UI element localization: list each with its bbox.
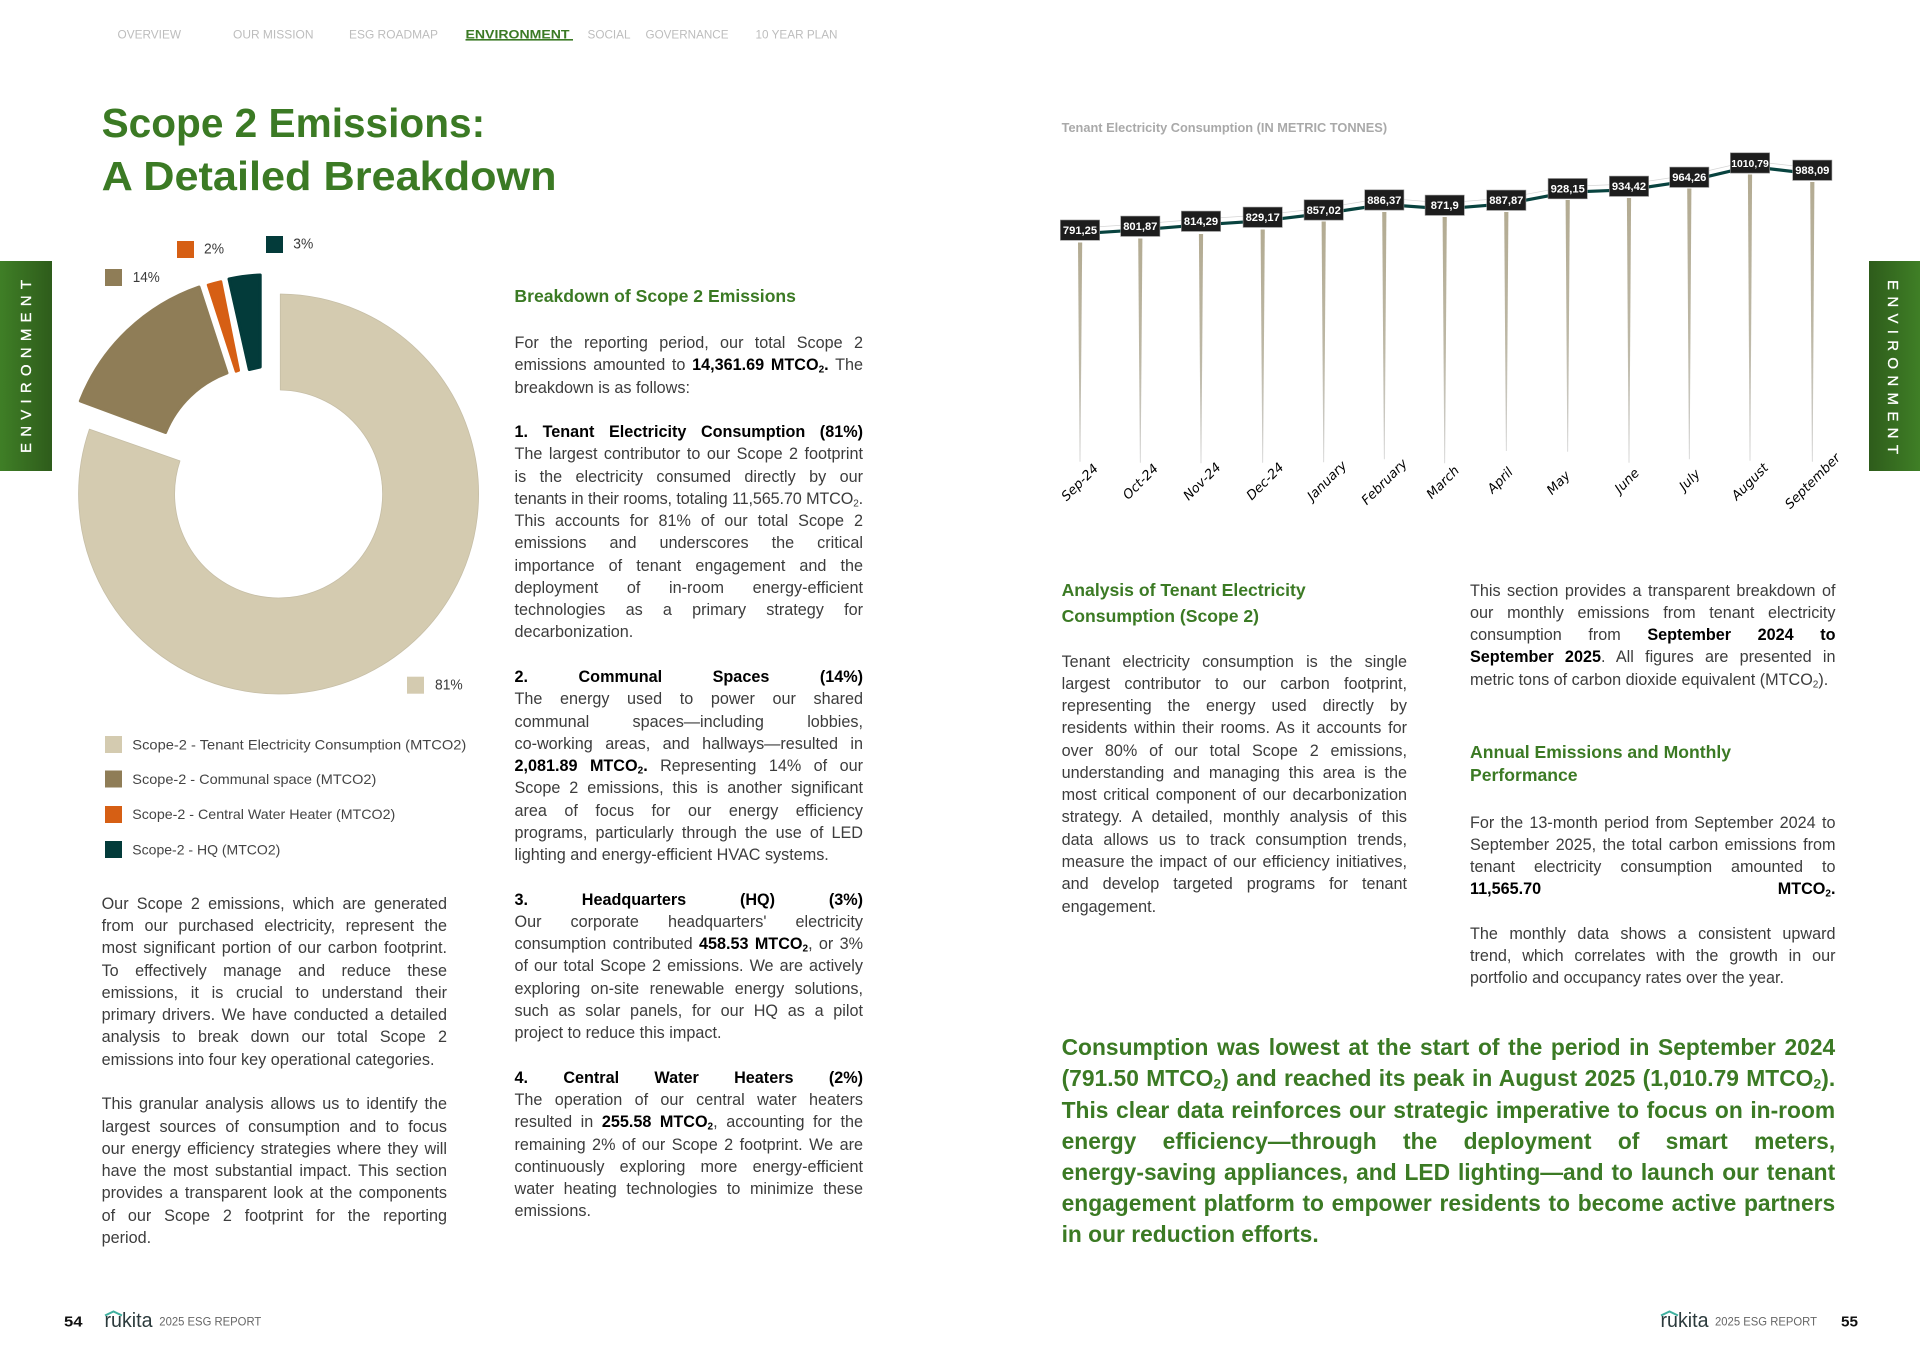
text block: transparency: metric tons of carbon dioxide equivalent (MTCO2). bbox=[1470, 671, 1828, 690]
text block: breakdown: 3. Headquarters (HQ) (3%) bbox=[514, 891, 863, 909]
text block: annual emissions: 11,565.70 MTCO2. bbox=[1470, 880, 1836, 900]
text block: scope 2 intro: primary drivers. We have conducted a detailed bbox=[102, 1006, 447, 1024]
x-axis labels: March bbox=[1424, 464, 1463, 502]
donut legend: Scope-2 - Tenant Electricity Consumption (MTCO2) bbox=[132, 736, 466, 752]
line chart: tenant electricity consumption: 1010,79 bbox=[1731, 159, 1769, 170]
line chart: tenant electricity consumption: 857,02 bbox=[1307, 205, 1341, 217]
text block: analysis: engagement. bbox=[1062, 898, 1156, 916]
heading: annual emissions: Performance bbox=[1470, 765, 1578, 785]
text block: breakdown: tenants in their rooms, totaling 11,565.70 MTCO2. bbox=[514, 490, 863, 509]
text block: breakdown: technologies as a primary strategy for bbox=[514, 601, 863, 619]
donut legend: Scope-2 - Communal space (MTCO2) bbox=[132, 771, 376, 787]
line chart: tenant electricity consumption: 814,29 bbox=[1184, 216, 1218, 228]
label: 3% bbox=[266, 236, 313, 253]
text block: breakdown: 4. Central Water Heaters (2%) bbox=[514, 1069, 863, 1087]
text block: transparency bbox=[1470, 582, 1836, 690]
text block: breakdown: 1. Tenant Electricity Consumption (81%) bbox=[514, 423, 863, 441]
text block: scope 2 intro: from our purchased electricity, represent the bbox=[102, 917, 447, 935]
text block: scope 2 intro: period. bbox=[102, 1229, 151, 1247]
text block: analysis: measure the impact of our efficiency initiatives, bbox=[1062, 853, 1407, 871]
text block: breakdown: project to reduce this impact. bbox=[514, 1024, 721, 1042]
line chart: tenant electricity consumption: 886,37 bbox=[1367, 195, 1401, 207]
x-axis labels: April bbox=[1484, 465, 1517, 498]
text block: breakdown: of our total Scope 2 emissions. We are actively bbox=[514, 957, 863, 975]
text block: analysis: data allows us to track consumption trends, bbox=[1062, 831, 1407, 849]
text block: breakdown: emissions amounted to 14,361.69 MTCO2. The bbox=[514, 356, 863, 376]
side tab: right bbox=[1869, 261, 1920, 471]
line chart: tenant electricity consumption: 887,87 bbox=[1489, 195, 1523, 207]
donut legend bbox=[105, 736, 466, 858]
line chart: tenant electricity consumption: 829,17 bbox=[1246, 212, 1280, 224]
page number: 55 bbox=[1841, 1313, 1858, 1330]
line chart: tenant electricity consumption: 964,26 bbox=[1672, 172, 1706, 184]
text block: scope 2 intro: largest sources of consumption and to focus bbox=[102, 1118, 447, 1136]
callout: energy-saving appliances, and LED lighting—and to launch our tenant bbox=[1062, 1159, 1835, 1185]
segment: HQ 3% bbox=[229, 275, 260, 370]
text block: breakdown: importance of tenant engagement and the bbox=[514, 557, 863, 575]
page number: 54 bbox=[64, 1313, 83, 1330]
footer: right page bbox=[1660, 1310, 1858, 1332]
text block: analysis: representing the energy used directly by bbox=[1062, 697, 1407, 715]
x-axis labels: Nov-24 bbox=[1181, 460, 1224, 504]
text block: annual emissions: portfolio and occupancy rates over the year. bbox=[1470, 969, 1784, 987]
text block: breakdown: water heating technologies to minimize these bbox=[514, 1180, 863, 1198]
line chart: tenant electricity consumption: 988,09 bbox=[1795, 165, 1829, 177]
text block: transparency: September 2025. All figures are presented in bbox=[1470, 648, 1835, 666]
heading: annual emissions: Annual Emissions and Monthly bbox=[1470, 742, 1731, 762]
side tab: right: ENVIRONMENT bbox=[1884, 280, 1901, 454]
callout: in our reduction efforts. bbox=[1062, 1221, 1319, 1247]
label: 81% bbox=[407, 676, 463, 694]
donut legend: Scope-2 - HQ (MTCO2) bbox=[132, 842, 280, 858]
text block: breakdown: lighting and energy-efficient HVAC systems. bbox=[514, 846, 829, 864]
text block: analysis: understanding and managing this area is the bbox=[1062, 764, 1407, 782]
side tab: left bbox=[0, 261, 52, 471]
line chart: tenant electricity consumption: 934,42 bbox=[1612, 181, 1646, 193]
text block: breakdown: The largest contributor to our Scope 2 footprint bbox=[514, 445, 863, 463]
text block: annual emissions: September 2025, the total carbon emissions from bbox=[1470, 836, 1836, 854]
text block: transparency: consumption from September 2024 to bbox=[1470, 626, 1836, 644]
logo: rukita: rukita bbox=[1660, 1310, 1709, 1332]
text block: scope 2 intro: our energy efficiency strategies where they will bbox=[102, 1140, 447, 1158]
text block: breakdown: programs, particularly through the use of LED bbox=[514, 824, 863, 842]
text block: annual emissions: tenant electricity consumption amounted to bbox=[1470, 858, 1836, 876]
label: 2%: 2% bbox=[204, 240, 224, 258]
line chart: tenant electricity consumption: 871,9 bbox=[1431, 200, 1459, 212]
segment: tenant electricity 81% bbox=[79, 294, 479, 694]
x-axis labels: May bbox=[1544, 468, 1574, 498]
text block: breakdown: 2,081.89 MTCO2. Representing 14% of our bbox=[514, 757, 863, 777]
text block: breakdown bbox=[514, 334, 863, 1220]
text block: transparency: This section provides a transparent breakdown of bbox=[1470, 582, 1836, 600]
text block: breakdown: Our corporate headquarters' electricity bbox=[514, 913, 863, 931]
text block: analysis: strategy. A detailed, monthly analysis of this bbox=[1062, 808, 1407, 826]
title bbox=[102, 100, 557, 199]
text block: analysis: over 80% of our total Scope 2 emissions, bbox=[1062, 742, 1407, 760]
label: 3%: 3% bbox=[293, 236, 313, 252]
text block: scope 2 intro: have the most substantial impact. This section bbox=[102, 1162, 447, 1180]
text block: scope 2 intro: This granular analysis allows us to identify the bbox=[102, 1095, 447, 1113]
text block: analysis bbox=[1062, 653, 1407, 916]
line chart: tenant electricity consumption bbox=[1059, 120, 1845, 512]
logo: rukita: rukita bbox=[104, 1310, 153, 1332]
text block: breakdown: co-working areas, and hallways—resulted in bbox=[514, 735, 863, 753]
navigation bar: OUR MISSION bbox=[233, 27, 314, 41]
text block: scope 2 intro: of our Scope 2 footprint for the reporting bbox=[102, 1207, 447, 1225]
text block: breakdown: such as solar panels, for our HQ as a pilot bbox=[514, 1002, 863, 1020]
line chart: tenant electricity consumption: 928,15 bbox=[1551, 184, 1585, 196]
text block: breakdown: exploring on-site renewable energy solutions, bbox=[514, 980, 863, 998]
heading: breakdown: Breakdown of Scope 2 Emissions bbox=[514, 286, 796, 306]
donut chart bbox=[78, 236, 479, 694]
text block: annual emissions bbox=[1470, 814, 1836, 987]
text block: annual emissions: trend, which correlates with the growth in our bbox=[1470, 947, 1836, 965]
donut legend: Scope-2 - Central Water Heater (MTCO2) bbox=[132, 806, 395, 822]
text block: scope 2 intro: most significant portion of our carbon footprint. bbox=[102, 939, 447, 957]
label: 81%: 81% bbox=[435, 676, 463, 694]
text block: analysis: residents within their rooms. As it accounts for bbox=[1062, 719, 1407, 737]
text block: breakdown: This accounts for 81% of our total Scope 2 bbox=[514, 512, 863, 530]
heading: analysis bbox=[1062, 580, 1306, 626]
callout bbox=[1062, 1034, 1836, 1247]
x-axis labels: January bbox=[1303, 458, 1350, 506]
navigation bar: ESG ROADMAP bbox=[349, 27, 438, 41]
callout: Consumption was lowest at the start of the period in September 2024 bbox=[1062, 1034, 1835, 1060]
x-axis labels: Dec-24 bbox=[1244, 460, 1287, 504]
x-axis labels: September bbox=[1782, 450, 1845, 512]
navigation bar bbox=[118, 27, 838, 41]
footer: right page: 2025 ESG REPORT bbox=[1715, 1314, 1818, 1328]
navigation bar: 10 YEAR PLAN bbox=[756, 27, 838, 41]
text block: analysis: most critical component of our decarbonization bbox=[1062, 786, 1407, 804]
callout: engagement platform to empower residents to become active partners bbox=[1062, 1190, 1835, 1216]
navigation bar: SOCIAL bbox=[588, 27, 631, 41]
text block: breakdown: deployment of in-room energy-efficient bbox=[514, 579, 863, 597]
text block: scope 2 intro: Our Scope 2 emissions, which are generated bbox=[102, 895, 447, 913]
text block: breakdown: consumption contributed 458.53 MTCO2, or 3% bbox=[514, 935, 863, 955]
text block: scope 2 intro: To effectively manage and reduce these bbox=[102, 962, 447, 980]
x-axis labels: February bbox=[1359, 456, 1411, 508]
trend line bbox=[1080, 166, 1812, 234]
text block: breakdown: emissions and underscores the critical bbox=[514, 534, 863, 552]
text block: scope 2 intro bbox=[102, 895, 447, 1247]
text block: breakdown: The operation of our central water heaters bbox=[514, 1091, 863, 1109]
chart title: Tenant Electricity Consumption (IN METRIC TONNES) bbox=[1062, 120, 1387, 135]
heading: analysis: Consumption (Scope 2) bbox=[1062, 606, 1259, 626]
navigation bar: OVERVIEW bbox=[118, 27, 182, 41]
callout: This clear data reinforces our strategic imperative to focus on in-room bbox=[1062, 1097, 1835, 1123]
data labels bbox=[1060, 153, 1832, 240]
navigation bar: GOVERNANCE bbox=[646, 27, 728, 41]
text block: breakdown: emissions. bbox=[514, 1202, 591, 1220]
title: A Detailed Breakdown bbox=[102, 153, 557, 199]
text block: transparency: our monthly emissions from tenant electricity bbox=[1470, 604, 1836, 622]
label: 14% bbox=[105, 269, 160, 286]
text block: scope 2 intro: emissions, it is crucial to understand their bbox=[102, 984, 447, 1002]
text block: scope 2 intro: provides a transparent look at the components bbox=[102, 1184, 447, 1202]
text block: breakdown: decarbonization. bbox=[514, 623, 633, 641]
callout: (791.50 MTCO2) and reached its peak in August 2025 (1,010.79 MTCO2). bbox=[1062, 1065, 1835, 1092]
text block: breakdown: 2. Communal Spaces (14%) bbox=[514, 668, 863, 686]
x-axis labels: Oct-24 bbox=[1120, 462, 1162, 503]
text block: breakdown: continuously exploring more energy-efficient bbox=[514, 1158, 863, 1176]
line chart: tenant electricity consumption: 801,87 bbox=[1123, 221, 1157, 233]
line chart: tenant electricity consumption: 791,25 bbox=[1063, 225, 1097, 237]
segment: central water heater 2% bbox=[208, 282, 239, 372]
x-axis labels: Sep-24 bbox=[1059, 462, 1102, 504]
navigation bar: ENVIRONMENT bbox=[466, 27, 570, 41]
heading: analysis: Analysis of Tenant Electricity bbox=[1062, 580, 1306, 600]
text block: annual emissions: For the 13-month period from September 2024 to bbox=[1470, 814, 1836, 832]
text block: breakdown: breakdown is as follows: bbox=[514, 379, 690, 397]
label: 2% bbox=[177, 240, 224, 258]
x-axis labels: August bbox=[1728, 460, 1772, 504]
footer: left page bbox=[64, 1310, 262, 1332]
text block: breakdown: The energy used to power our shared bbox=[514, 690, 863, 708]
text block: analysis: largest contributor to our carbon footprint, bbox=[1062, 675, 1407, 693]
x-axis labels: June bbox=[1610, 466, 1643, 499]
segment: communal space 14% bbox=[80, 287, 227, 432]
text block: breakdown: communal spaces—including lobbies, bbox=[514, 713, 863, 731]
title: Scope 2 Emissions: bbox=[102, 100, 485, 146]
text block: scope 2 intro: analysis to break down our total Scope 2 bbox=[102, 1028, 447, 1046]
label: 14%: 14% bbox=[133, 269, 160, 286]
text block: analysis: Tenant electricity consumption is the single bbox=[1062, 653, 1407, 671]
text block: breakdown: For the reporting period, our total Scope 2 bbox=[514, 334, 863, 352]
text block: breakdown: Scope 2 emissions, this is another significant bbox=[514, 779, 863, 797]
callout: energy efficiency—through the deployment of smart meters, bbox=[1062, 1128, 1835, 1154]
text block: breakdown: remaining 2% of our Scope 2 footprint. We are bbox=[514, 1136, 863, 1154]
trend shadow line bbox=[1080, 161, 1812, 228]
side tab: left: ENVIRONMENT bbox=[18, 280, 35, 453]
text block: scope 2 intro: emissions into four key operational categories. bbox=[102, 1051, 435, 1069]
stems bbox=[1078, 174, 1814, 463]
text block: breakdown: resulted in 255.58 MTCO2, accounting for the bbox=[514, 1113, 863, 1133]
text block: breakdown: is the electricity consumed directly by our bbox=[514, 468, 863, 486]
text block: analysis: and develop targeted programs for tenant bbox=[1062, 875, 1407, 893]
text block: annual emissions: The monthly data shows a consistent upward bbox=[1470, 925, 1836, 943]
x-axis labels bbox=[1059, 450, 1845, 512]
heading: annual emissions bbox=[1470, 742, 1731, 785]
footer: left page: 2025 ESG REPORT bbox=[159, 1314, 262, 1328]
x-axis labels: July bbox=[1675, 467, 1704, 496]
text block: breakdown: area of focus for our energy efficiency bbox=[514, 802, 863, 820]
